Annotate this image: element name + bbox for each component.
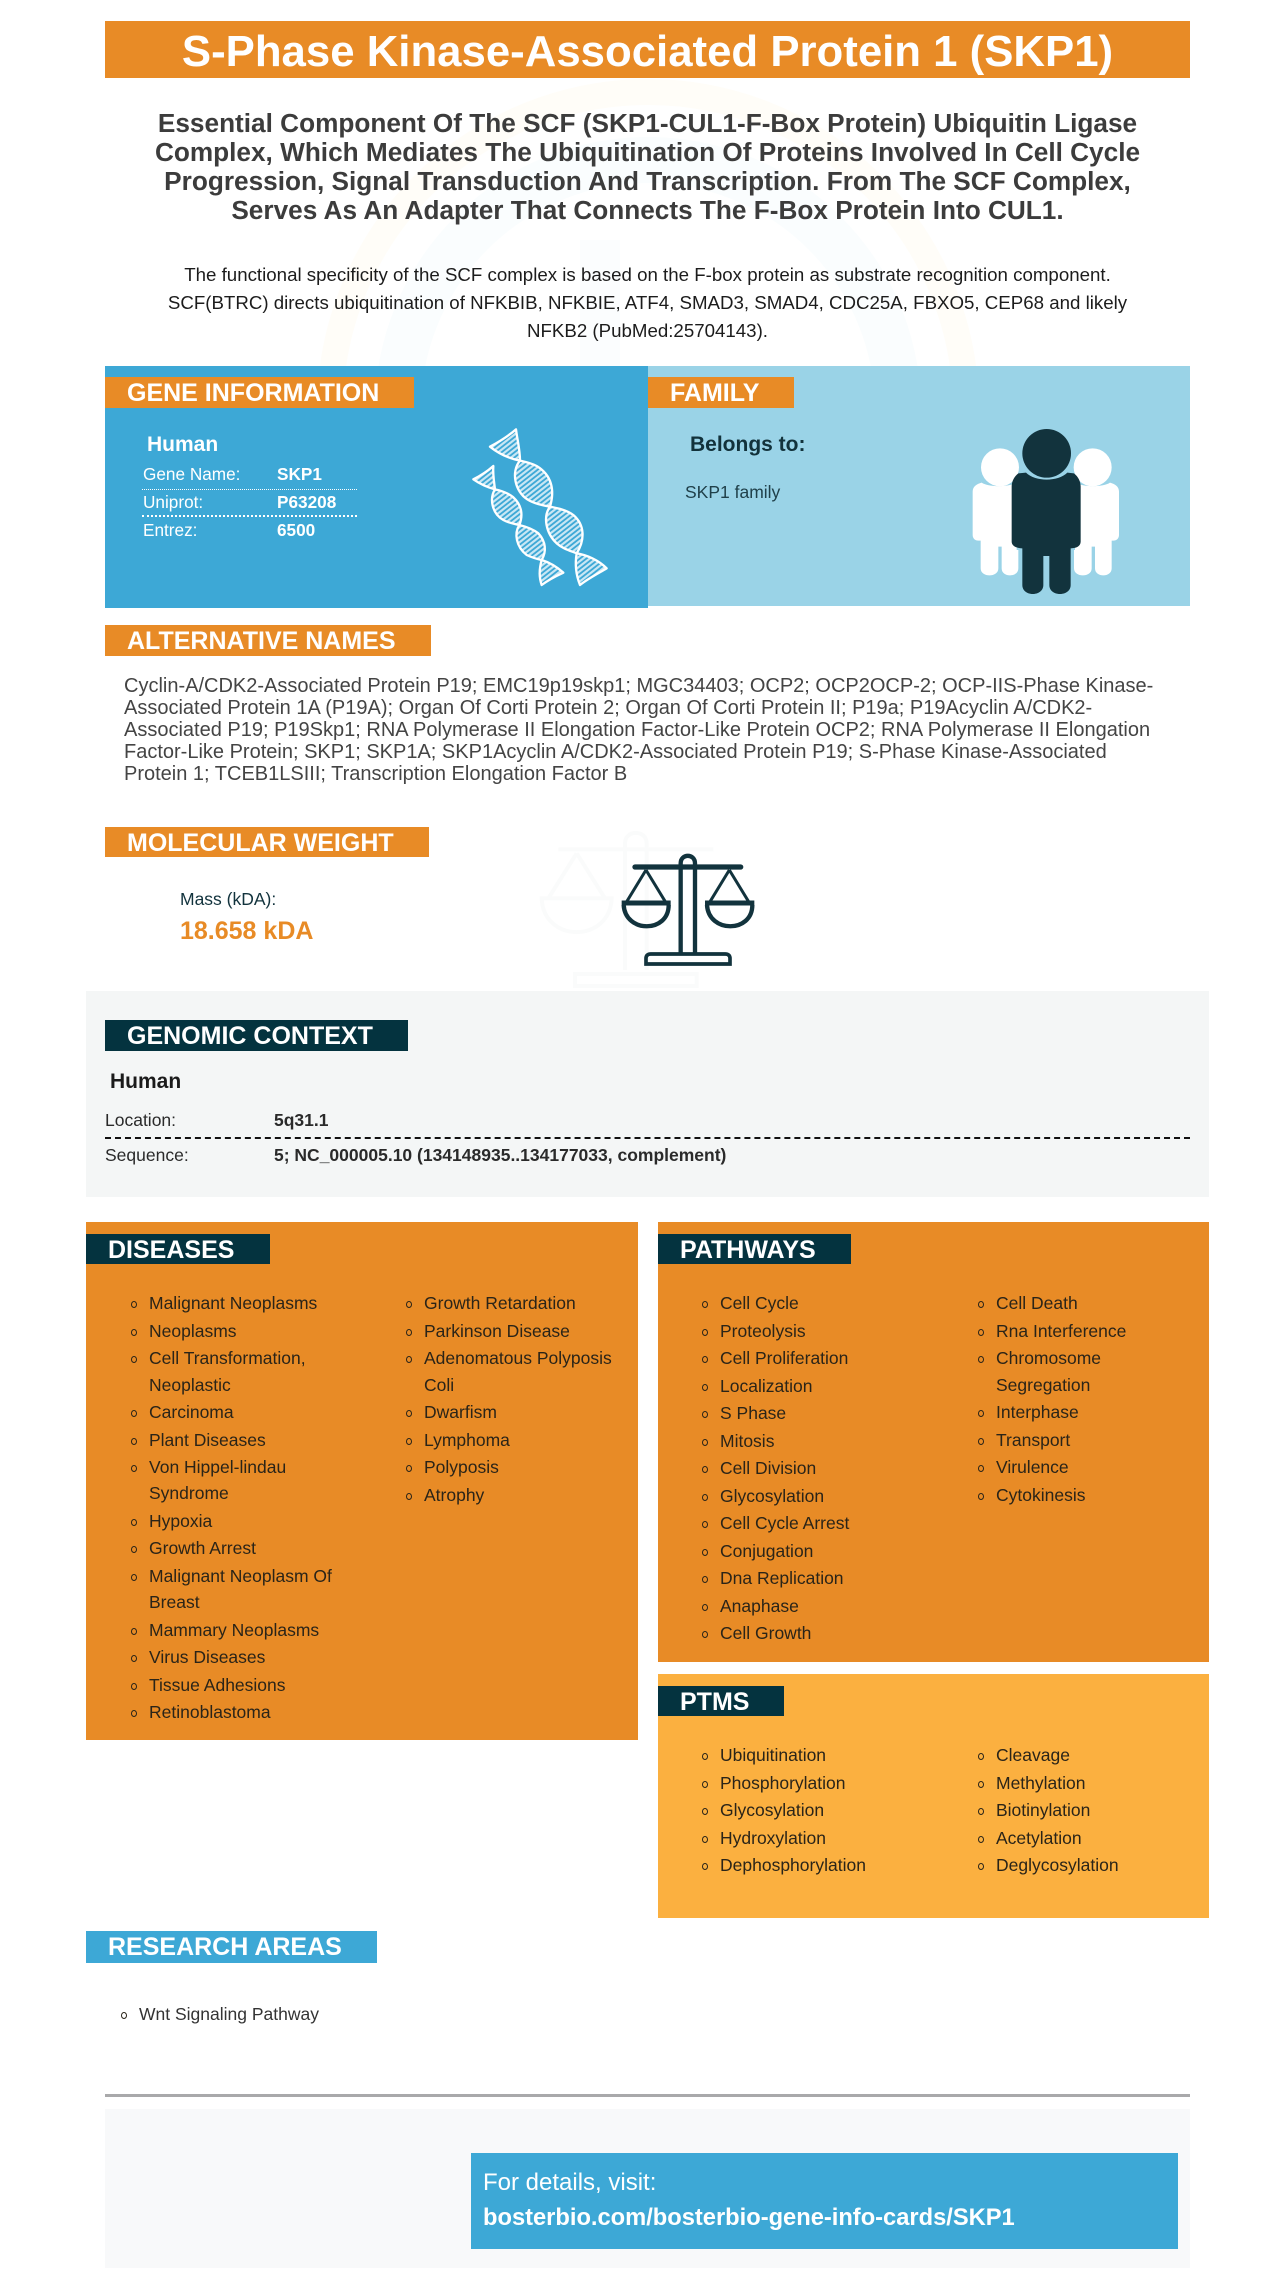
disease list column 2 — [406, 1293, 612, 1505]
panel: diseases — [86, 1222, 638, 1740]
ptm list column 1: Glycosylation — [720, 1800, 824, 1820]
research areas list: Wnt Signaling Pathway — [139, 2004, 319, 2024]
heading: pathways: PATHWAYS — [680, 1236, 816, 1264]
description: The functional specificity of the SCF complex is based on the F-box protein as substrate recognition component. — [184, 264, 1111, 285]
pathway list column 1: Mitosis — [720, 1431, 774, 1451]
ptm list column 2: Cleavage — [996, 1745, 1070, 1765]
ptm list column 2: Methylation — [996, 1773, 1086, 1793]
panel: pathways — [658, 1222, 1209, 1662]
location row — [105, 1110, 328, 1130]
description: NFKB2 (PubMed:25704143). — [527, 320, 768, 341]
alternative names text: Associated P19; P19Skp1; RNA Polymerase II Elongation Factor-Like Protein OCP2; RNA Polymerase II Elongation — [124, 719, 1150, 741]
pathway list column 2: Transport — [996, 1430, 1070, 1450]
pathway list column 1: Conjugation — [720, 1541, 813, 1561]
heading: family: FAMILY — [670, 379, 759, 407]
pathway list column 1: Dna Replication — [720, 1568, 844, 1588]
heading: ptms — [658, 1686, 784, 1716]
panel: footer — [105, 2109, 1190, 2268]
disease list column 1 — [131, 1293, 332, 1722]
mass value: 18.658 kDA — [180, 917, 313, 945]
callout url: bosterbio.com/bosterbio-gene-info-cards/SKP1 — [483, 2205, 1015, 2231]
background watermark — [0, 0, 1288, 366]
disease list column 1: Von Hippel-lindau — [149, 1457, 286, 1477]
subtitle: Complex, Which Mediates The Ubiquitination Of Proteins Involved In Cell Cycle — [155, 137, 1140, 167]
gene fields table — [142, 464, 357, 540]
disease list column 1: Carcinoma — [149, 1402, 234, 1422]
icon: dna helix — [472, 428, 608, 586]
uniprot row: Uniprot: — [143, 492, 203, 512]
pathway list column 2: Cell Death — [996, 1293, 1078, 1313]
disease list column 2: Lymphoma — [424, 1430, 510, 1450]
ptm list column 2: Biotinylation — [996, 1800, 1090, 1820]
gene name row — [143, 464, 322, 484]
alternative names text: Factor-Like Protein; SKP1; SKP1A; SKP1Acyclin A/CDK2-Associated Protein P19; S-Phase Kinase-Associated — [124, 741, 1107, 763]
subtitle: Serves As An Adapter That Connects The F-Box Protein Into CUL1. — [231, 195, 1064, 225]
heading: pathways — [658, 1234, 851, 1264]
location row: Location: — [105, 1110, 176, 1130]
description — [168, 264, 1127, 341]
disease list column 1: Mammary Neoplasms — [149, 1620, 319, 1640]
disease list column 2: Adenomatous Polyposis — [424, 1348, 612, 1368]
description: SCF(BTRC) directs ubiquitination of NFKBIB, NFKBIE, ATF4, SMAD3, SMAD4, CDC25A, FBXO5, CEP68 and likely — [168, 292, 1127, 313]
callout: details link — [471, 2153, 1178, 2249]
pathway list column 2: Cytokinesis — [996, 1485, 1085, 1505]
family name: SKP1 family — [685, 482, 780, 502]
disease list column 1: Malignant Neoplasm Of — [149, 1566, 332, 1586]
mass label: Mass (kDA): — [180, 889, 276, 909]
panel: genomic context — [86, 991, 1209, 1197]
alternative names text — [124, 675, 1153, 785]
icon: faint scale watermark — [520, 820, 780, 990]
heading: genomic context: GENOMIC CONTEXT — [127, 1022, 373, 1050]
ptm list column 2: Acetylation — [996, 1828, 1082, 1848]
heading: ptms: PTMS — [680, 1688, 749, 1716]
sequence row: 5; NC_000005.10 (134148935..134177033, complement) — [274, 1145, 726, 1165]
heading: diseases: DISEASES — [108, 1236, 234, 1264]
disease list column 2: Parkinson Disease — [424, 1321, 570, 1341]
gene name row: SKP1 — [277, 464, 322, 484]
pathway list column 2: Virulence — [996, 1457, 1069, 1477]
heading: family — [648, 377, 794, 408]
heading: molecular weight: MOLECULAR WEIGHT — [127, 829, 394, 857]
disease list column 2: Coli — [424, 1375, 454, 1395]
pathway list column 2: Segregation — [996, 1375, 1090, 1395]
ptm list column 2 — [978, 1745, 1119, 1875]
ptm list column 1: Phosphorylation — [720, 1773, 846, 1793]
subtitle — [155, 108, 1140, 225]
disease list column 1: Growth Arrest — [149, 1538, 256, 1558]
alternative names text: Associated Protein 1A (P19A); Organ Of Corti Protein 2; Organ Of Corti Protein II; P19a; P19Acyclin A/CDK2- — [124, 697, 1092, 719]
disease list column 1: Retinoblastoma — [149, 1702, 271, 1722]
pathway list column 1: Anaphase — [720, 1596, 799, 1616]
pathway list column 1: Glycosylation — [720, 1486, 824, 1506]
entrez row: 6500 — [277, 520, 315, 540]
pathway list column 1: Cell Proliferation — [720, 1348, 848, 1368]
heading: alternative names: ALTERNATIVE NAMES — [127, 627, 396, 655]
ptm list column 1: Dephosphorylation — [720, 1855, 866, 1875]
pathway list column 2: Rna Interference — [996, 1321, 1126, 1341]
ptm list column 2: Deglycosylation — [996, 1855, 1119, 1875]
disease list column 1: Cell Transformation, — [149, 1348, 306, 1368]
panel: family — [648, 366, 1190, 606]
disease list column 2: Polyposis — [424, 1457, 499, 1477]
uniprot row — [143, 492, 336, 512]
ptm list column 1: Hydroxylation — [720, 1828, 826, 1848]
belongs to label: Belongs to: — [690, 433, 806, 456]
disease list column 2: Atrophy — [424, 1485, 484, 1505]
alternative names text: Protein 1; TCEB1LSIII; Transcription Elongation Factor B — [124, 763, 627, 785]
disease list column 2: Dwarfism — [424, 1402, 497, 1422]
subtitle: Essential Component Of The SCF (SKP1-CUL1-F-Box Protein) Ubiquitin Ligase — [158, 108, 1137, 138]
gene name row: Gene Name: — [143, 464, 240, 484]
title: S-Phase Kinase-Associated Protein 1 (SKP1) — [182, 27, 1113, 76]
alternative names text: Cyclin-A/CDK2-Associated Protein P19; EMC19p19skp1; MGC34403; OCP2; OCP2OCP-2; OCP-IIS-Phase Kinase- — [124, 675, 1153, 697]
panel: ptms — [658, 1674, 1209, 1918]
species label: Human — [147, 433, 218, 456]
ptm list column 1: Ubiquitination — [720, 1745, 826, 1765]
pathway list column 1: Proteolysis — [720, 1321, 806, 1341]
disease list column 1: Tissue Adhesions — [149, 1675, 286, 1695]
icon: balance scale — [622, 854, 754, 966]
pathway list column 1 — [702, 1293, 850, 1643]
disease list column 1: Hypoxia — [149, 1511, 212, 1531]
pathway list column 1: Cell Division — [720, 1458, 816, 1478]
disease list column 1: Neoplasms — [149, 1321, 237, 1341]
uniprot row: P63208 — [277, 492, 336, 512]
species label: Human — [110, 1070, 181, 1093]
pathway list column 2 — [978, 1293, 1126, 1505]
pathway list column 1: Cell Growth — [720, 1623, 811, 1643]
callout label: For details, visit: — [483, 2169, 656, 2196]
ptm list column 1 — [702, 1745, 866, 1875]
heading: gene information: GENE INFORMATION — [127, 379, 379, 407]
disease list column 1: Virus Diseases — [149, 1647, 265, 1667]
pathway list column 1: S Phase — [720, 1403, 786, 1423]
heading: research areas: RESEARCH AREAS — [108, 1933, 342, 1961]
icon: group of people — [972, 429, 1119, 594]
pathway list column 2: Interphase — [996, 1402, 1079, 1422]
disease list column 1: Breast — [149, 1592, 200, 1612]
pathway list column 2: Chromosome — [996, 1348, 1101, 1368]
heading: diseases — [86, 1234, 270, 1264]
disease list column 1: Neoplastic — [149, 1375, 231, 1395]
pathway list column 1: Localization — [720, 1376, 812, 1396]
sequence row: Sequence: — [105, 1145, 189, 1165]
subtitle: Progression, Signal Transduction And Transcription. From The SCF Complex, — [164, 166, 1131, 196]
disease list column 2: Growth Retardation — [424, 1293, 576, 1313]
disease list column 1: Malignant Neoplasms — [149, 1293, 317, 1313]
entrez row: Entrez: — [143, 520, 197, 540]
disease list column 1: Syndrome — [149, 1483, 229, 1503]
pathway list column 1: Cell Cycle Arrest — [720, 1513, 849, 1533]
pathway list column 1: Cell Cycle — [720, 1293, 799, 1313]
panel: gene information — [105, 366, 648, 608]
location row: 5q31.1 — [274, 1110, 328, 1130]
entrez row — [143, 520, 315, 540]
disease list column 1: Plant Diseases — [149, 1430, 266, 1450]
